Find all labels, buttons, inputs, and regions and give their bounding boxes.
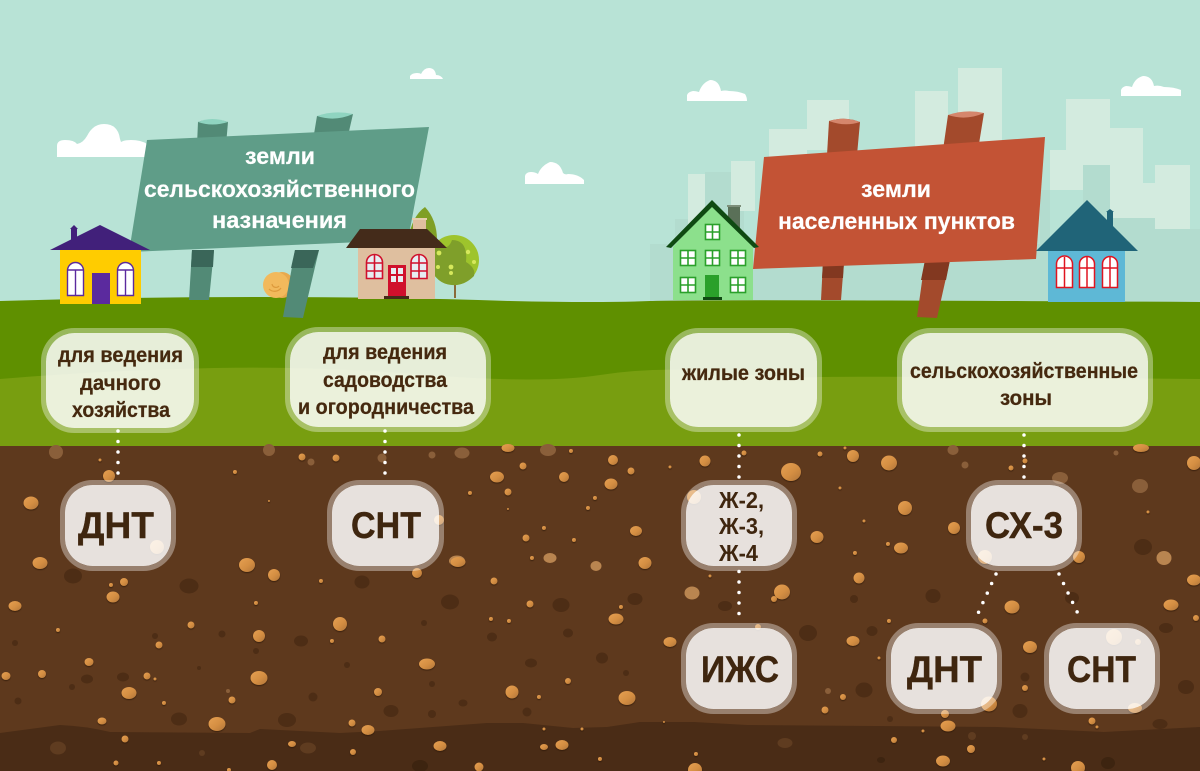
code box: СНТ	[330, 482, 442, 568]
house: blue	[1036, 200, 1138, 302]
code box: СНТ lower: СНТ	[1067, 649, 1136, 690]
callout: dacha farming	[44, 330, 196, 430]
callout: gardening: садоводства	[323, 369, 447, 392]
callout: gardening	[288, 330, 488, 430]
sign text: назначения	[212, 207, 347, 233]
callout: residential zones: жилые зоны	[681, 362, 805, 385]
code box: СХ-3: СХ-3	[985, 505, 1063, 546]
callout: residential zones	[668, 330, 820, 430]
code box: ДНТ: ДНТ	[78, 505, 154, 546]
sign text: земли	[245, 143, 315, 169]
code box: Ж-2, Ж-3, Ж-4	[684, 482, 794, 568]
grass upper band	[0, 297, 1200, 400]
sign board	[753, 137, 1045, 269]
sign text: сельскохозяйственного	[144, 176, 415, 202]
code box: Ж-2, Ж-3, Ж-4: Ж-4	[718, 540, 758, 566]
city skyline	[650, 68, 1200, 304]
code box: ИЖС	[684, 626, 794, 712]
callout: agricultural zones: зоны	[1000, 387, 1052, 410]
code box: ДНТ lower	[888, 626, 1000, 712]
callout: dacha farming: хозяйства	[72, 399, 170, 422]
soil spots dark	[12, 539, 1194, 771]
sign text: земли	[861, 176, 931, 202]
code box: ИЖС: ИЖС	[701, 649, 779, 690]
trees	[408, 207, 479, 298]
code box: СНТ: СНТ	[351, 505, 421, 546]
soil stones	[2, 444, 1200, 771]
sign: settlement lands	[753, 111, 1045, 318]
callout: gardening: для ведения	[323, 341, 447, 364]
deep soil layer	[0, 722, 1200, 771]
callout: dacha farming: дачного	[80, 372, 161, 395]
sign text	[778, 176, 1015, 234]
code box: Ж-2, Ж-3, Ж-4: Ж-2,	[718, 487, 764, 513]
code box: Ж-2, Ж-3, Ж-4: Ж-3,	[718, 513, 764, 539]
callout: agricultural zones	[900, 330, 1150, 430]
sign posts back	[189, 112, 353, 318]
clouds	[57, 68, 1181, 184]
code box: СНТ lower	[1046, 626, 1158, 712]
dotted connectors	[118, 431, 1081, 624]
code box: ДНТ	[62, 482, 174, 568]
soil spots faded	[49, 444, 1172, 756]
sign text	[144, 143, 415, 233]
sign: agricultural lands	[129, 112, 429, 318]
code box: СХ-3	[968, 482, 1080, 568]
callout: gardening: и огородничества	[298, 396, 474, 419]
sign board	[129, 127, 429, 252]
callout: agricultural zones: сельскохозяйственные	[910, 360, 1138, 383]
house: yellow	[50, 225, 150, 304]
code box: ДНТ lower: ДНТ	[907, 649, 982, 690]
soil	[0, 446, 1200, 771]
sign text: населенных пунктов	[778, 208, 1015, 234]
house: green	[666, 200, 759, 300]
sign posts back	[821, 111, 984, 318]
hay bale	[263, 272, 294, 298]
house: beige	[346, 218, 447, 299]
callout: dacha farming: для ведения	[58, 344, 183, 367]
grass lower band	[0, 368, 1200, 446]
